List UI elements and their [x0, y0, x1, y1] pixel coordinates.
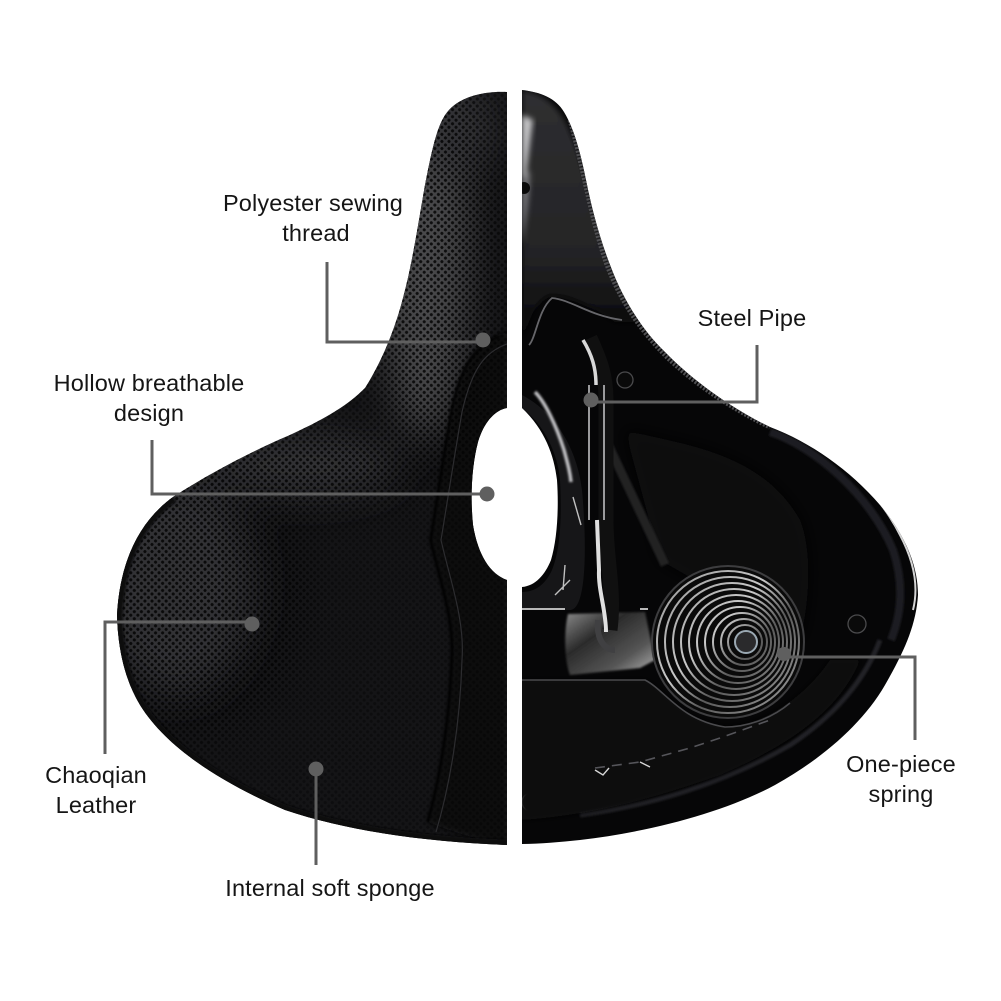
right half: seat underside	[510, 80, 930, 860]
callout: Chaoqian Leather: Leather	[56, 792, 136, 818]
callout: Hollow breathable design: Hollow breathable	[54, 370, 244, 396]
left half: seat top in leather	[117, 92, 507, 845]
lip under the nose	[529, 298, 622, 345]
frame strut	[606, 440, 665, 565]
lower pocket	[522, 772, 730, 815]
callout: Internal soft sponge	[225, 762, 435, 901]
callout: One-piece spring: spring	[869, 781, 933, 807]
callout: Hollow breathable design	[54, 370, 494, 502]
callout: Steel Pipe	[584, 305, 806, 408]
callout: One-piece spring: One-piece	[846, 751, 956, 777]
steel pipe	[583, 338, 615, 650]
rim mesh by the hole	[522, 395, 585, 610]
callout: Internal soft sponge: Internal soft sponge	[225, 875, 435, 901]
edge seam	[117, 497, 507, 845]
glare on nose	[522, 115, 533, 245]
callout: Polyester sewing thread: thread	[282, 220, 350, 246]
silver plate	[565, 612, 655, 675]
callout: Polyester sewing thread	[223, 190, 490, 348]
inner pocket	[625, 430, 808, 640]
callout: Chaoqian Leather: Chaoqian	[45, 762, 147, 788]
callout: One-piece spring	[777, 647, 956, 807]
leather sheen	[95, 60, 495, 695]
callout: Hollow breathable design: design	[114, 400, 184, 426]
callout: Chaoqian Leather	[45, 616, 260, 818]
inner panel around the hole	[428, 332, 507, 845]
screws	[522, 372, 866, 811]
ribbed edge	[570, 120, 770, 427]
one-piece spring	[652, 566, 804, 718]
callout: Steel Pipe: Steel Pipe	[698, 305, 806, 331]
stitching	[428, 336, 500, 822]
nose shell	[522, 90, 640, 340]
callout: Polyester sewing thread: Polyester sewing	[223, 190, 403, 216]
leather texture	[117, 92, 507, 845]
outer rim highlight	[795, 437, 915, 610]
screw hole on nose	[522, 182, 530, 194]
